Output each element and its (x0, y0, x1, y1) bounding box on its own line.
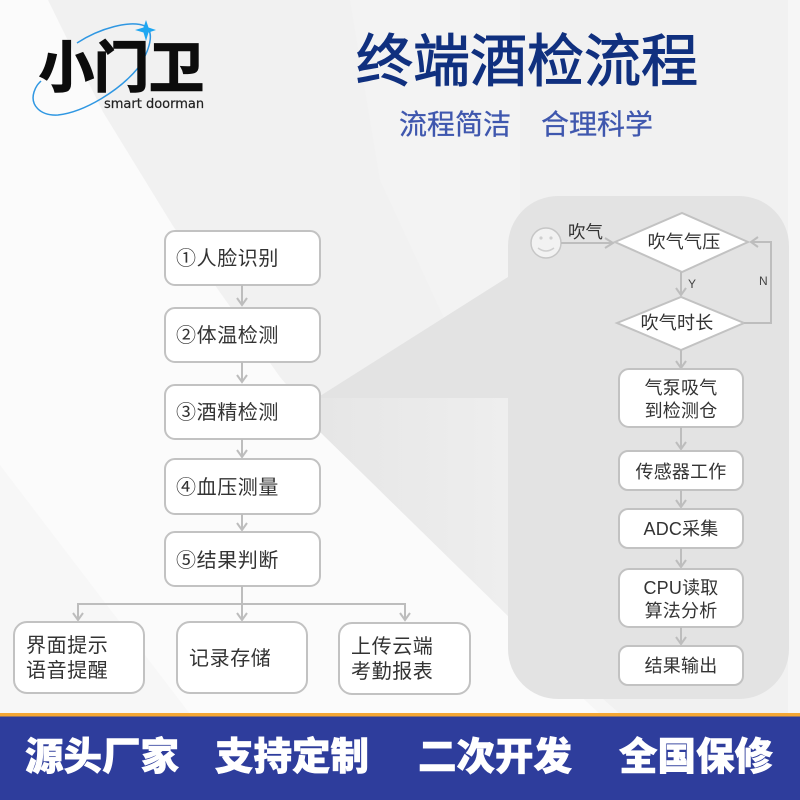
decision: blow duration (617, 297, 744, 350)
arrow (237, 514, 247, 530)
result box: display and voice (14, 622, 144, 693)
result box: cloud: 上传云端 (351, 635, 433, 658)
step: pump: 气泵吸气 (645, 378, 717, 398)
footer band (0, 713, 800, 800)
step: ADC: ADC采集 (643, 519, 719, 539)
result box: display and voice: 语音提醒 (26, 659, 108, 682)
logo star (135, 20, 156, 41)
footer slogans: 支持定制 (215, 736, 369, 779)
decision: blow pressure: 吹气气压 (648, 232, 720, 252)
logo wordmark: 小门卫 (39, 37, 204, 99)
panel: alcohol test detail (508, 196, 789, 699)
result box: storage: 记录存储 (189, 647, 271, 670)
label: Y: Y (688, 277, 696, 291)
title: 终端酒检流程 (356, 30, 698, 94)
step 2: ②体温检测 (176, 324, 279, 347)
decision: blow pressure (615, 213, 748, 272)
logo tagline: smart doorman (104, 97, 204, 112)
arrow (676, 627, 686, 644)
step 3: ③酒精检测 (176, 401, 279, 424)
label: blow: 吹气 (568, 222, 603, 242)
icon: smiley (531, 228, 561, 258)
arrow (237, 439, 247, 457)
subtitle: 合理科学 (541, 109, 653, 140)
subtitle (399, 109, 653, 140)
step 5 (165, 532, 320, 586)
decision: blow duration: 吹气时长 (641, 313, 713, 333)
step 5: ⑤结果判断 (176, 549, 279, 572)
subtitle: 流程简洁 (399, 109, 511, 140)
arrow: no loop (744, 237, 771, 323)
step: CPU: CPU读取 (643, 578, 719, 598)
step: CPU: 算法分析 (645, 601, 717, 621)
arrow (676, 490, 686, 507)
arrow (676, 350, 686, 368)
main process steps (165, 231, 320, 586)
step: sensor: 传感器工作 (636, 462, 726, 482)
step: pump: 到检测仓 (645, 401, 717, 421)
result box: cloud: 考勤报表 (351, 660, 433, 683)
step: output: 结果输出 (645, 656, 717, 676)
logo orbit (33, 24, 150, 115)
result branch arrows (73, 586, 410, 620)
footer slogans: 全国保修 (619, 736, 774, 779)
step 1 (165, 231, 320, 285)
footer slogans: 二次开发 (418, 736, 572, 779)
step 2 (165, 308, 320, 362)
arrow (237, 362, 247, 382)
arrow (676, 427, 686, 449)
arrow: yes (676, 272, 686, 295)
step: ADC (619, 509, 743, 548)
step: CPU (619, 569, 743, 627)
arrow (676, 548, 686, 567)
logo (33, 20, 204, 115)
step: sensor (619, 451, 743, 490)
label: N: N (759, 274, 768, 288)
step 1: ①人脸识别 (176, 247, 279, 270)
arrow (237, 285, 247, 305)
connector wedge from step 3 to panel (320, 277, 508, 616)
result box: cloud (339, 623, 470, 694)
step 4 (165, 459, 320, 514)
footer slogans (25, 736, 774, 779)
arrow: blow to pressure (561, 238, 613, 248)
step: pump (619, 369, 743, 427)
footer slogans: 源头厂家 (25, 736, 179, 779)
step: output (619, 646, 743, 685)
result box: storage (177, 622, 307, 693)
step 4: ④血压测量 (176, 476, 279, 499)
step 3 (165, 385, 320, 439)
result box: display and voice: 界面提示 (26, 634, 108, 657)
